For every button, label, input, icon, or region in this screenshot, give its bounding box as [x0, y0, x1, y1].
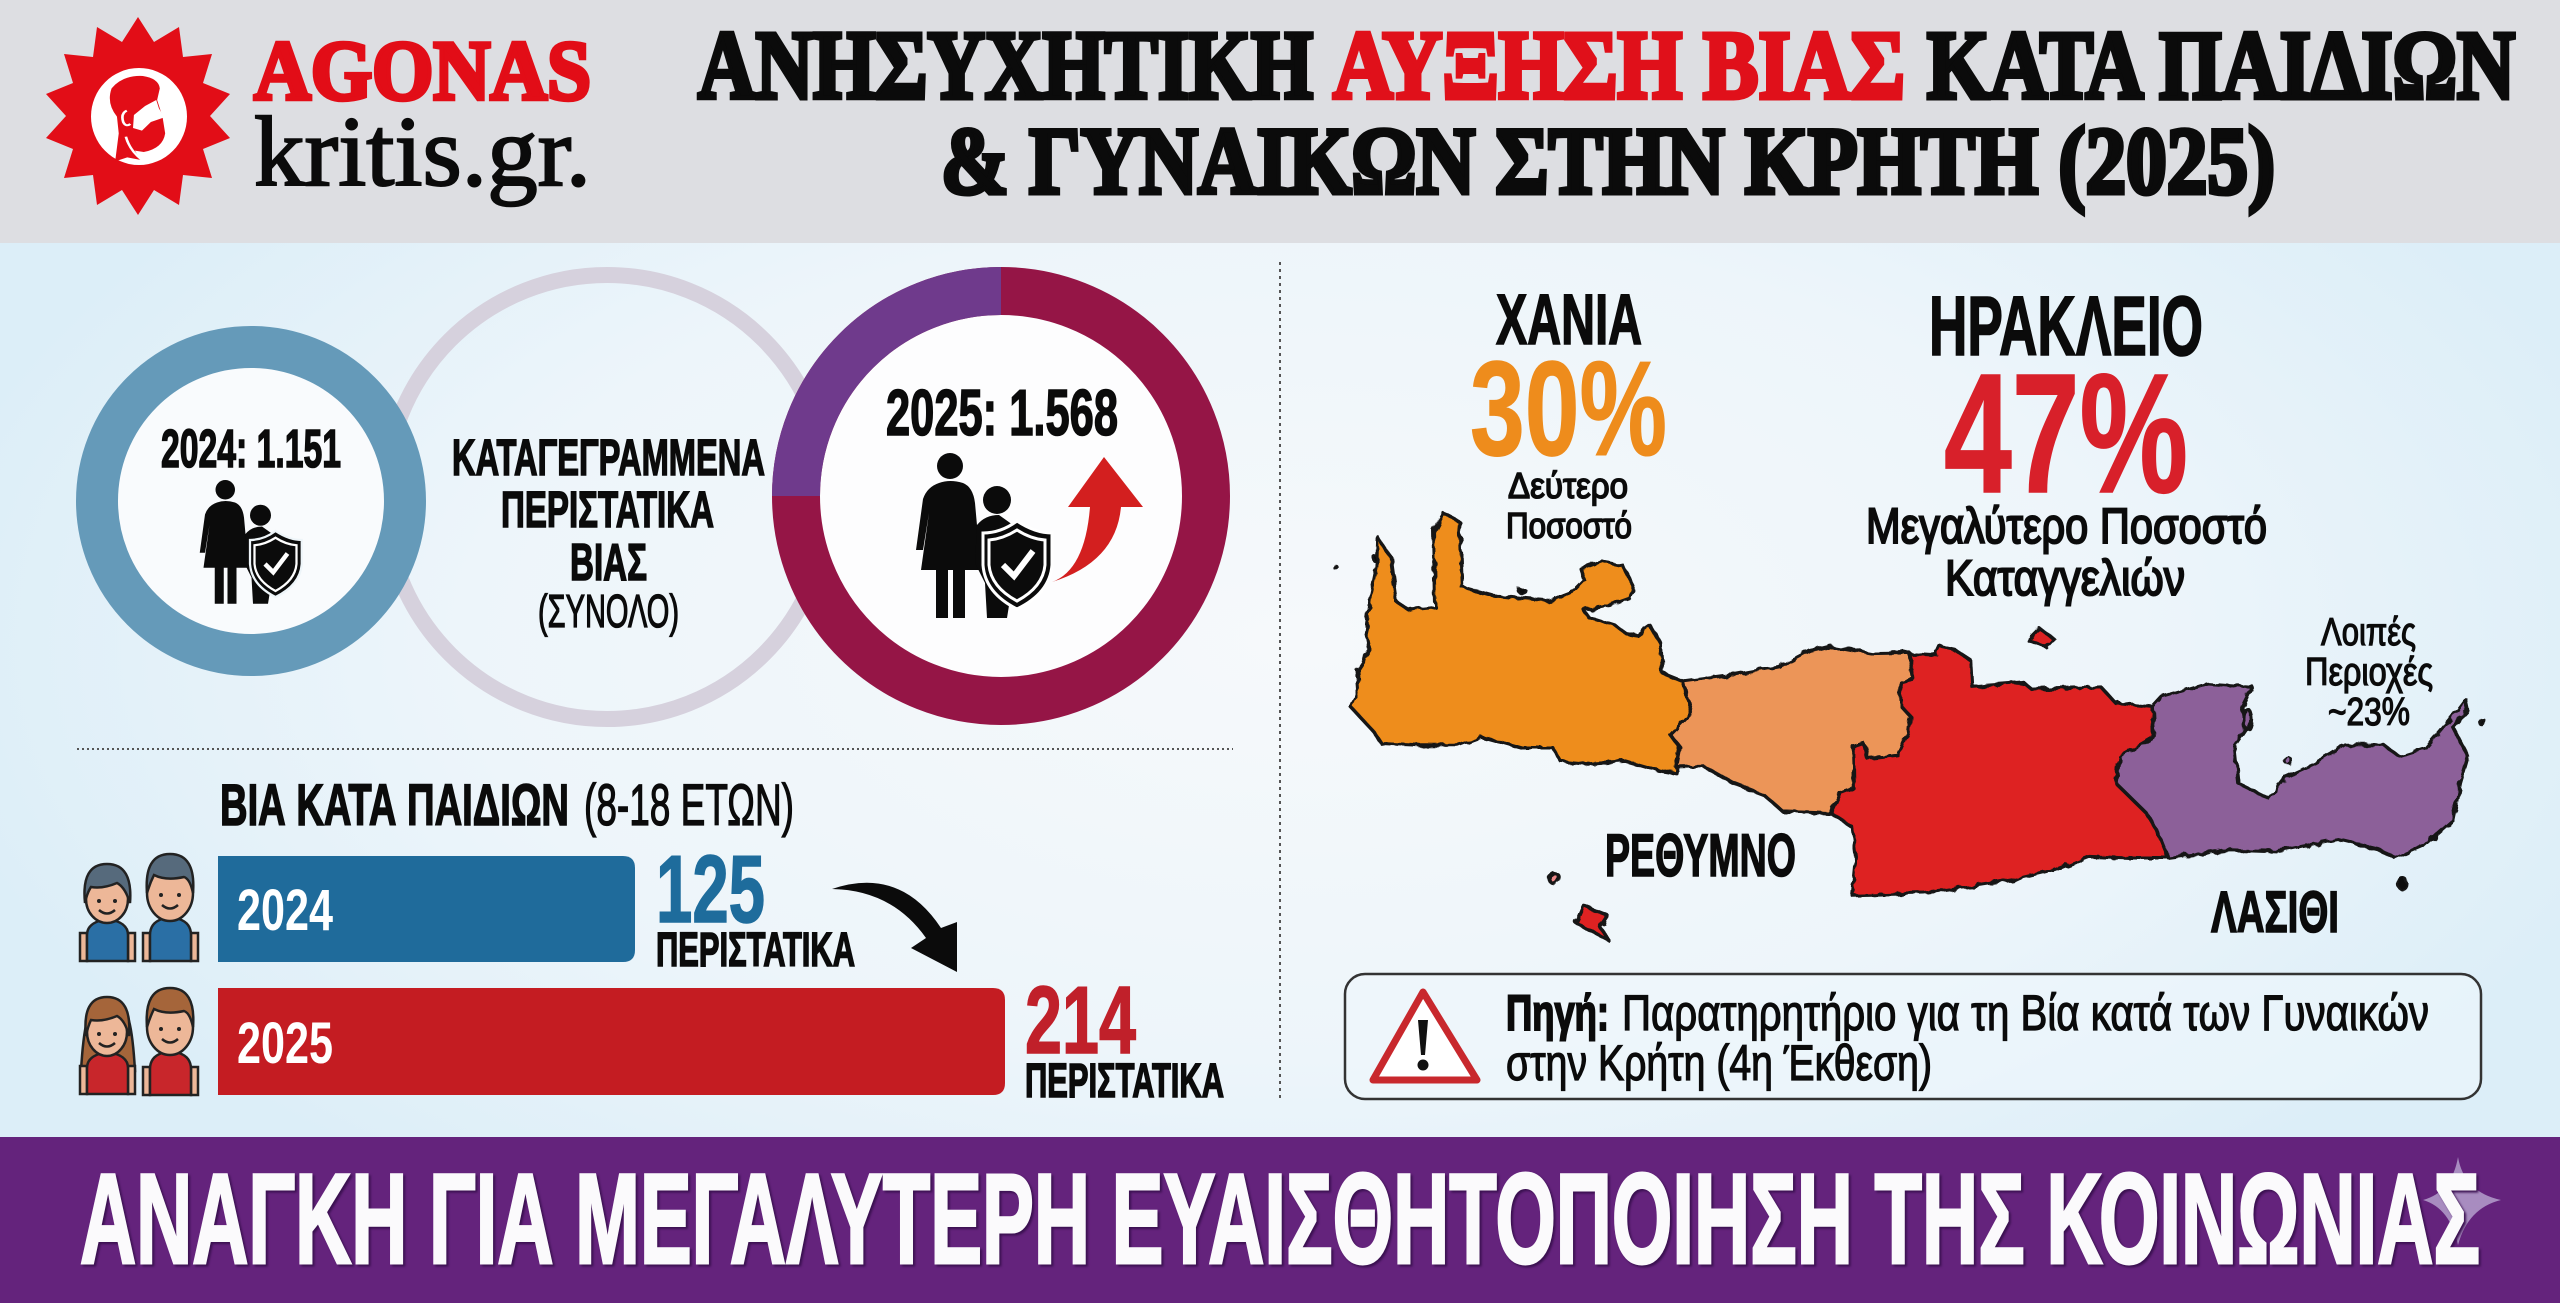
- bar label 2024: 2024: [237, 878, 333, 943]
- value 214: 214: [1025, 967, 1136, 1074]
- ring: total: [385, 275, 829, 719]
- callout: source: [1345, 974, 2481, 1099]
- value 2024: 2024: 1.151: [161, 419, 341, 479]
- panel: regional map: [1335, 279, 2484, 1099]
- icon: warning triangle: [1373, 992, 1477, 1080]
- ring: 2024: [97, 347, 405, 655]
- ring: 2025: [796, 291, 1206, 701]
- label: recorded violence cases: ΒΙΑΣ: [570, 534, 647, 592]
- bar label 2025: 2025: [237, 1011, 333, 1076]
- map of Crete: [1335, 513, 2484, 941]
- bar 2024: [218, 856, 635, 962]
- arrow: increase: [1052, 457, 1143, 582]
- heading: (8-18 ΕΤΩΝ): [584, 773, 794, 838]
- label: recorded violence cases: ΠΕΡΙΣΤΑΤΙΚΑ: [501, 481, 714, 538]
- unit label 2025: ΠΕΡΙΣΤΑΤΙΚΑ: [1025, 1055, 1224, 1108]
- unit label 2024: ΠΕΡΙΣΤΑΤΙΚΑ: [656, 924, 855, 977]
- note: largest share: Μεγαλύτερο Ποσοστό: [1866, 498, 2267, 554]
- logo: [46, 17, 591, 215]
- title line 2: & ΓΥΝΑΙΚΩΝ ΣΤΗΝ ΚΡΗΤΗ (2025): [941, 108, 2275, 214]
- note: largest share: Καταγγελιών: [1945, 550, 2185, 606]
- title line 1: [698, 12, 2515, 119]
- value: Chania share: 30%: [1470, 333, 1667, 484]
- label: Heraklion: ΗΡΑΚΛΕΙΟ: [1929, 279, 2203, 373]
- icon: children 2025: [80, 988, 198, 1095]
- label: recorded violence cases: ΚΑΤΑΓΕΓΡΑΜΜΕΝΑ: [452, 429, 765, 486]
- icon: woman and child with shield 2024: [200, 480, 302, 604]
- region: Lasithi: [2116, 683, 2468, 858]
- label: Rethymno: ΡΕΘΥΜΝΟ: [1605, 822, 1796, 889]
- icon: children 2024: [80, 854, 198, 961]
- title line 1: ΑΝΗΣΥΧΗΤΙΚΗ: [698, 12, 1313, 119]
- icon: sparkle: [2423, 1157, 2501, 1245]
- region: Rethymno: [1671, 646, 1913, 813]
- note: second share: Ποσοστό: [1506, 505, 1632, 546]
- label: Heraklion: [1866, 279, 2267, 606]
- value: Heraklion share: 47%: [1944, 339, 2188, 529]
- label: Lasithi: ΛΑΣΙΘΙ: [2211, 880, 2339, 945]
- source text: Πηγή:: [1506, 985, 1609, 1041]
- logo wordmark kritis.gr.: kritis.gr.: [254, 96, 591, 207]
- title: [698, 12, 2515, 214]
- label: other regions: Περιοχές: [2305, 651, 2433, 694]
- value 2025: 2025: 1.568: [886, 376, 1118, 449]
- label: recorded violence cases: [452, 429, 765, 637]
- note: second share: [1506, 465, 1632, 546]
- note: largest share: [1866, 498, 2267, 606]
- panel: total recorded cases: [97, 275, 1206, 719]
- title line 1: ΑΥΞΗΣΗ ΒΙΑΣ: [1333, 12, 1905, 119]
- note: second share: Δεύτερο: [1508, 465, 1628, 506]
- label: Chania: ΧΑΝΙΑ: [1496, 281, 1642, 360]
- label: recorded violence cases: (ΣΥΝΟΛΟ): [538, 585, 679, 637]
- islands: [1335, 555, 2484, 941]
- value 125: 125: [656, 836, 765, 943]
- header band: [0, 0, 2560, 243]
- label: other regions: Λοιπές: [2321, 611, 2416, 654]
- region: Heraklion: [1831, 647, 2168, 895]
- label: other regions: [2305, 611, 2433, 734]
- source text: στην Κρήτη (4η Έκθεση): [1506, 1035, 1932, 1091]
- logo emblem: [46, 17, 230, 215]
- heading: ΒΙΑ ΚΑΤΑ ΠΑΙΔΙΩΝ: [220, 773, 569, 838]
- region: Chania: [1351, 513, 1691, 773]
- logo wordmark AGONAS: AGONAS: [254, 24, 591, 118]
- footer band: [0, 1137, 2560, 1303]
- label: Chania: [1470, 281, 1667, 546]
- label: other regions: ~23%: [2328, 691, 2410, 734]
- icon: woman and child with shield 2025: [916, 453, 1052, 618]
- source text: [1506, 985, 2429, 1091]
- arrow: black trend: [832, 883, 957, 972]
- bar 2025: [218, 988, 1005, 1095]
- panel: violence against children: [80, 773, 1224, 1108]
- background panel: [0, 243, 2560, 1137]
